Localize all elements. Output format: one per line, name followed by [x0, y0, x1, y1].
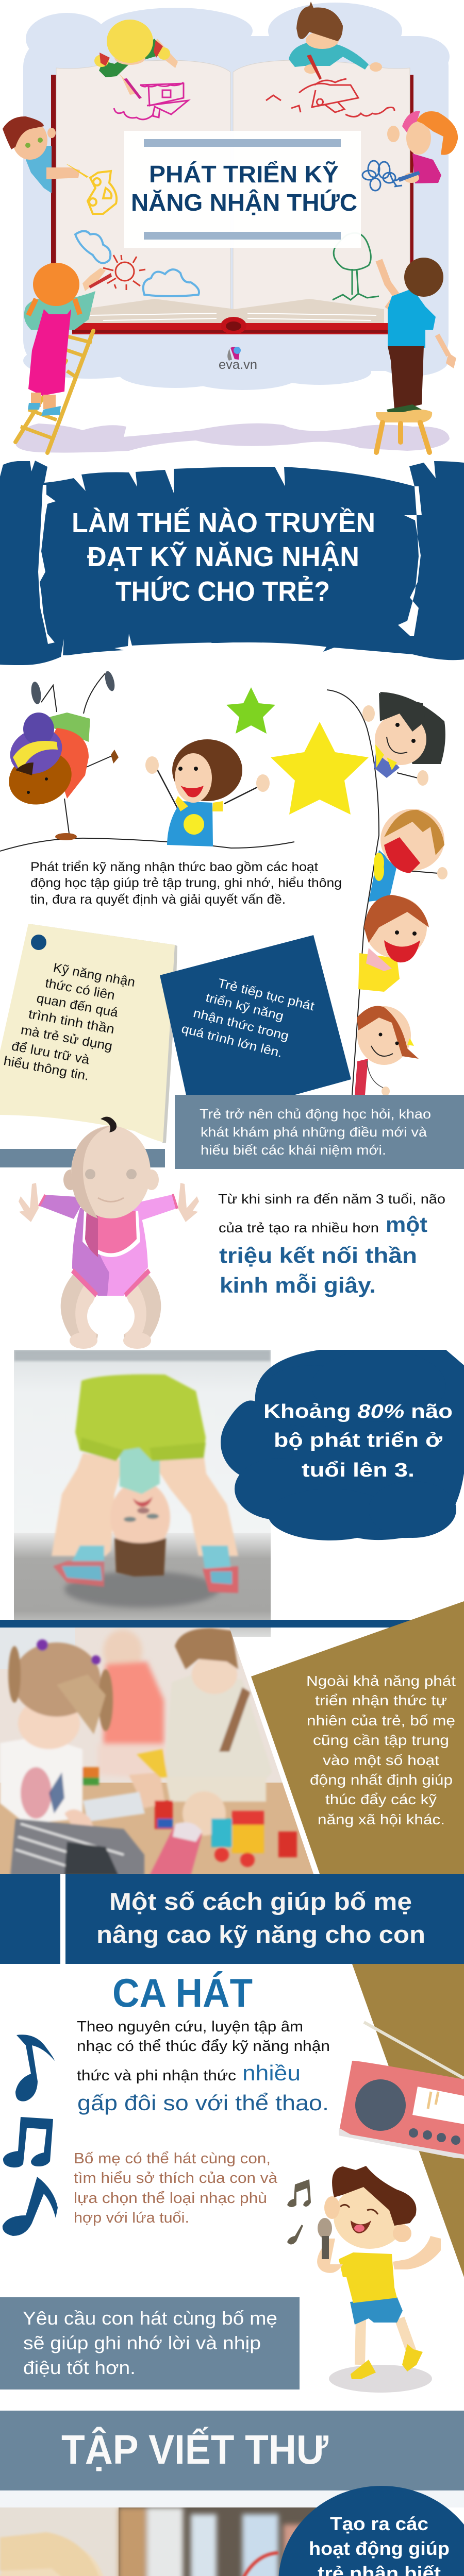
note text: triển kỹ năng: [204, 991, 285, 1023]
band: sing along: [0, 2297, 300, 2389]
panel: letter writing: [0, 2411, 464, 2576]
kid: cheering boy: [145, 739, 270, 846]
panel text: thúc đẩy các kỹ: [325, 1791, 437, 1807]
callout text: tuổi lên 3.: [302, 1460, 415, 1481]
panel text: năng xã hội khác.: [318, 1811, 445, 1827]
panel text: nhiên của trẻ, bố mẹ: [307, 1713, 455, 1728]
paragraph: definition: động học tập giúp trẻ tập trung, ghi nhớ, hiểu thông: [30, 876, 342, 890]
panel: blue rotated note: [160, 935, 351, 1123]
panel: cartoon children: [0, 670, 448, 1096]
small notes: [287, 2179, 311, 2245]
drawing: pink house: [114, 82, 188, 120]
title: NĂNG NHẬN THỨC: [131, 189, 357, 216]
paragraph: definition: Phát triển kỹ năng nhận thức bao gồm các hoạt: [30, 860, 318, 874]
icon: music note 3: [3, 2177, 58, 2236]
panel text: vào một số hoạt: [323, 1752, 439, 1768]
paragraph: sing with child: [74, 2150, 278, 2226]
panel: singing section: [0, 1964, 464, 2393]
heading: ĐẠT KỸ NĂNG NHẬN: [87, 541, 359, 572]
panel: active learning band: [0, 1095, 464, 1169]
character: girl on ladder: [15, 263, 112, 453]
character: boy on stool: [376, 258, 456, 452]
band text: sẽ giúp ghi nhớ lời và nhịp: [23, 2332, 261, 2353]
kid: pigtail girl: [355, 1006, 419, 1096]
character: blonde girl: [94, 20, 178, 99]
circle text: Tạo ra các: [330, 2513, 428, 2534]
note text: Trẻ tiếp tục phát: [217, 976, 316, 1013]
navy cloud callout: [221, 1350, 464, 1540]
note text: nhận thức trong: [192, 1006, 290, 1043]
band text: khát khám phá những điều mới và: [201, 1124, 427, 1140]
panel text: triển nhận thức tự: [315, 1692, 447, 1708]
paragraph: sing with child: tìm hiểu sở thích của con và: [74, 2170, 278, 2187]
note text: hiểu thông tin.: [3, 1054, 90, 1083]
ground shadow: [15, 423, 450, 453]
paragraph: music research: thức và phi nhận thức: [77, 2067, 236, 2084]
torn white edges: [38, 485, 422, 644]
text: one million connections: triệu kết nối thần: [219, 1243, 417, 1267]
heading: LÀM THẾ NÀO TRUYỀN: [72, 507, 375, 538]
paragraph: music research: Theo nguyên cứu, luyện tập âm: [77, 2019, 303, 2035]
icon: music note 1: [15, 2035, 55, 2102]
note text: để lưu trữ và: [10, 1039, 91, 1067]
open book: [51, 60, 413, 334]
illustration: baby: [19, 1117, 199, 1349]
paragraph: sing with child: hợp với lứa tuổi.: [74, 2210, 189, 2226]
panel text: [306, 1673, 456, 1827]
title card: [124, 131, 361, 248]
title: PHÁT TRIỂN KỸ: [149, 161, 339, 188]
navy circle note: [278, 2486, 464, 2576]
drawing: blue flower: [362, 161, 402, 191]
logo text: eva.vn: [219, 358, 257, 372]
yellow star: [271, 722, 369, 815]
heading text: nâng cao kỹ năng cho con: [96, 1921, 425, 1948]
callout text: bộ phát triển ở: [274, 1430, 443, 1451]
paper sheet: [28, 924, 177, 1143]
text: one million connections: Từ khi sinh ra đến năm 3 tuổi, não: [218, 1191, 445, 1207]
note text: trình tinh thần: [27, 1007, 115, 1037]
torn navy banner: [0, 461, 464, 665]
divider band: [0, 1620, 412, 1628]
drawing: red house: [266, 79, 394, 117]
note text: quá trình lớn lên.: [180, 1022, 284, 1060]
panel: hero illustration: [3, 2, 458, 453]
green star: [226, 687, 275, 734]
note hole: [31, 935, 46, 950]
heading text: Một số cách giúp bố mẹ: [109, 1888, 412, 1915]
drawing: cloud: [143, 269, 199, 296]
kid: laughing boy: [369, 809, 448, 902]
drawing: blue cloud: [75, 231, 110, 263]
paragraph: music research: nhạc có thể thúc đẩy kỹ năng nhận: [77, 2038, 330, 2055]
paragraph: sing with child: Bố mẹ có thể hát cùng con,: [74, 2150, 271, 2167]
circle text: hoạt động giúp: [309, 2538, 450, 2559]
panel: how to convey heading: [0, 461, 464, 665]
note text: quan đến quá: [36, 991, 119, 1020]
callout text: Khoảng 80% não: [263, 1401, 453, 1422]
paragraph: music research: nhiều: [242, 2061, 301, 2085]
paragraph: definition: tin, đưa ra quyết định và giải quyết vấn đề.: [30, 892, 286, 907]
character: brown hair boy: [289, 2, 382, 80]
illustration: singing boy: [287, 2166, 441, 2393]
circle text: [309, 2513, 450, 2576]
gold panel: parents focus: [251, 1601, 464, 1874]
text: one million connections: một: [386, 1212, 427, 1236]
wall line: [327, 690, 379, 1095]
note text: thức có liên: [44, 976, 116, 1003]
pale strip: [0, 2490, 464, 2507]
band text: Trẻ trở nên chủ động học hỏi, khao: [200, 1106, 431, 1122]
panel: paper note: [0, 924, 177, 1143]
paragraph: music research: [77, 2019, 330, 2115]
panel text: cũng cần tập trung: [313, 1732, 449, 1748]
heading: singing: CA HÁT: [112, 1970, 253, 2015]
photo: children playing with toys: [0, 1628, 320, 1875]
drawing: sun: [103, 255, 145, 290]
drawing: yellow car: [88, 171, 117, 214]
photo: girl reading: [0, 2507, 335, 2576]
note text: mà trẻ sử dụng: [20, 1023, 113, 1054]
heading band: [0, 2411, 464, 2490]
paragraph: music research: gấp đôi so với thể thao.: [77, 2091, 329, 2115]
gold wedge: [352, 1964, 464, 2277]
kid: red hair girl: [358, 895, 429, 992]
character: girl on right side: [387, 111, 458, 183]
band text: hiểu biết các khái niệm mới.: [201, 1142, 386, 1158]
logo: eva.vn: [219, 347, 257, 372]
navy heading band: [0, 1874, 464, 1964]
ground line: [0, 838, 294, 851]
callout text: [263, 1401, 453, 1481]
character: boy on left side: [3, 116, 89, 193]
band text: điệu tốt hơn.: [23, 2357, 136, 2378]
paragraph: sing with child: lựa chọn thể loại nhạc phù: [74, 2190, 267, 2207]
kid: black hair girl: [362, 692, 445, 786]
text: one million connections: [218, 1191, 445, 1297]
panel text: Ngoài khả năng phát: [306, 1673, 456, 1689]
illustration: radio: [339, 2022, 464, 2159]
note text: [180, 970, 316, 1065]
drawing: green tree: [333, 233, 379, 300]
text: one million connections: kinh mỗi giây.: [220, 1273, 376, 1297]
cloud background: [23, 3, 450, 390]
heading: THỨC CHO TRẺ?: [115, 576, 330, 607]
note text: Kỹ năng nhận: [52, 960, 136, 990]
kid: handstand boy: [2, 670, 119, 840]
note text: [3, 955, 136, 1089]
heading text: TẬP VIẾT THƯ: [61, 2427, 329, 2472]
text: one million connections: của trẻ tạo ra nhiều hơn: [219, 1220, 379, 1235]
panel text: động nhất định giúp: [310, 1772, 453, 1788]
photo: child bending over: [14, 1350, 271, 1637]
icon: music note 2: [3, 2117, 53, 2167]
band text: Yêu cầu con hát cùng bố mẹ: [23, 2308, 277, 2329]
